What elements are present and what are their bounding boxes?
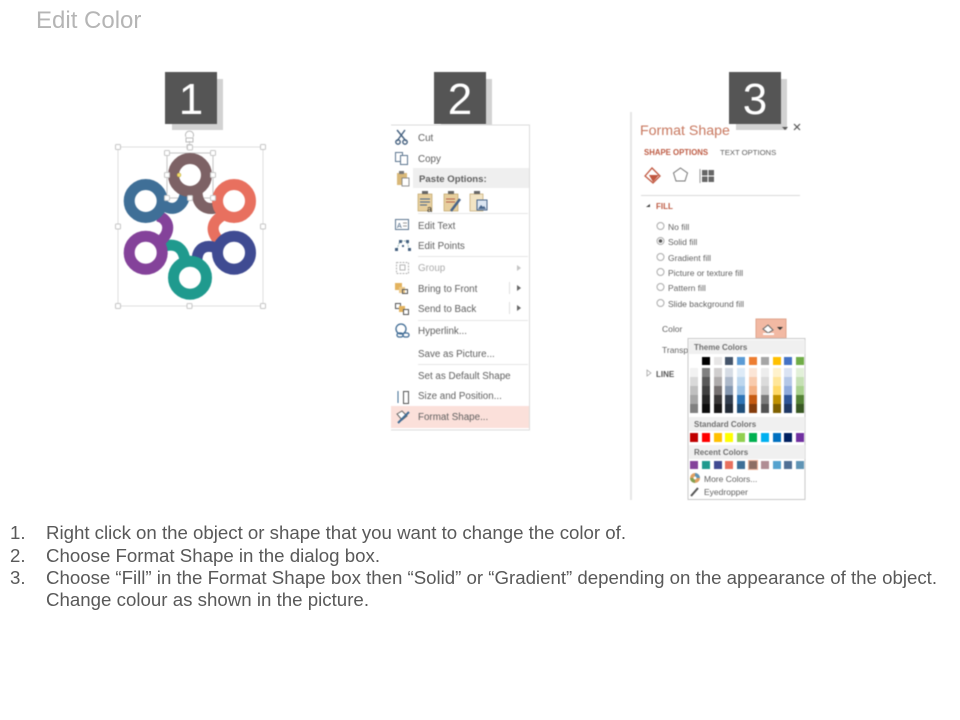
menu labels: Size and Position... [418, 391, 502, 402]
ring: teal [174, 261, 206, 294]
menu labels: Set as Default Shape [418, 371, 511, 382]
ring: purple [129, 236, 162, 269]
format shape pane [630, 112, 805, 500]
tab: text options: TEXT OPTIONS [720, 148, 776, 157]
ring: navy [218, 236, 250, 269]
paste options highlight [413, 168, 529, 188]
step badge 3 [729, 72, 787, 130]
recent colors heading [689, 445, 805, 459]
step badge 1 [165, 72, 223, 130]
fill heading [646, 202, 673, 211]
pane left border [630, 112, 632, 500]
color button [756, 319, 786, 338]
icon: edit points [395, 240, 411, 251]
fill radio options: Solid fill [668, 237, 697, 247]
instruction 3: 3. [10, 567, 26, 588]
menu labels: Format Shape... [418, 412, 488, 423]
instruction 3: Change colour as shown in the picture. [46, 589, 369, 610]
theme colour top row [690, 357, 804, 365]
ring: brown [174, 158, 206, 192]
menu labels [418, 133, 511, 423]
theme colors heading: Theme Colors [694, 343, 748, 352]
instruction 3 [10, 567, 937, 610]
menu labels: Edit Text [418, 221, 456, 232]
submenu arrows [510, 265, 521, 314]
instructions list [10, 522, 937, 610]
icon: paste merge [444, 191, 460, 211]
icon: size properties [700, 169, 714, 183]
step badge 1: 1 [179, 75, 203, 124]
instruction 1: 1. [10, 522, 26, 543]
standard colors heading: Standard Colors [694, 420, 757, 429]
inner selection handles [164, 145, 216, 200]
menu panel [391, 125, 530, 430]
standard colors heading [689, 417, 805, 431]
menu labels: Bring to Front [418, 284, 478, 295]
icon: edit text [396, 220, 408, 230]
line heading: LINE [656, 370, 675, 379]
transparency label: Transp [662, 345, 688, 355]
icon: size and position [398, 391, 408, 404]
fill radio options [657, 222, 744, 309]
menu labels: Cut [418, 133, 434, 144]
instruction 2: Choose Format Shape in the dialog box. [46, 545, 380, 566]
recent colors heading: Recent Colors [694, 448, 749, 457]
title: Edit Color [36, 7, 141, 34]
icon: paste [397, 171, 409, 186]
icon: hyperlink [396, 324, 409, 337]
recent colour row [690, 460, 804, 470]
menu labels: Save as Picture... [418, 349, 495, 360]
tab: shape options: SHAPE OPTIONS [644, 148, 708, 157]
menu labels: Copy [418, 154, 441, 165]
eyedropper item: Eyedropper [704, 487, 748, 497]
icon: edit text: A [397, 223, 402, 230]
icon: group [396, 262, 408, 274]
connector tails [158, 191, 226, 264]
icon: send to back [396, 304, 408, 314]
theme colors heading [689, 340, 805, 354]
menu labels: Edit Points [418, 241, 465, 252]
ring: blue [129, 184, 162, 218]
standard colour row [690, 433, 804, 442]
fill radio options: Picture or texture fill [668, 268, 743, 278]
line heading [647, 370, 675, 379]
fill heading: FILL [656, 202, 673, 211]
selected ring shape [116, 131, 266, 308]
step badge 2 [434, 72, 492, 130]
icon: paste keep source: a [427, 204, 432, 214]
icon: fill bucket [645, 168, 660, 183]
pane divider [641, 194, 800, 196]
theme colour shades [690, 368, 804, 413]
instruction 2: 2. [10, 545, 26, 566]
menu labels: Group [418, 263, 446, 274]
instruction 3: Choose “Fill” in the Format Shape box then “Solid” or “Gradient” depending on the appearance of the object. [46, 567, 937, 588]
step badge 2: 2 [448, 75, 472, 124]
pane controls [782, 124, 800, 130]
menu dividers [418, 214, 528, 364]
colour dropdown [688, 338, 805, 500]
ring: orange [218, 184, 250, 218]
context menu [391, 125, 530, 430]
menu labels: Send to Back [418, 304, 476, 315]
icon: copy [396, 152, 408, 164]
icon: paste picture [470, 191, 487, 211]
fill radio options: Gradient fill [668, 253, 711, 263]
selection frame [116, 131, 266, 308]
icon: pentagon [674, 168, 688, 181]
icon: scissors [396, 130, 407, 144]
pane title: Format Shape [640, 123, 730, 139]
fill radio options: Slide background fill [668, 299, 744, 309]
icon: paste keep source [418, 191, 432, 214]
format shape highlight [391, 406, 529, 428]
more colors item: More Colors... [704, 474, 757, 484]
icon: bring to front [395, 283, 408, 294]
menu labels: Paste Options: [419, 174, 487, 185]
color label: Color [662, 324, 682, 334]
menu labels: Hyperlink... [418, 326, 467, 337]
step badge 3: 3 [743, 75, 767, 124]
instruction 1: Right click on the object or shape that you want to change the color of. [46, 522, 626, 543]
fill radio options: Pattern fill [668, 283, 706, 293]
icon: format shape [397, 411, 409, 423]
fill radio options: No fill [668, 222, 689, 232]
